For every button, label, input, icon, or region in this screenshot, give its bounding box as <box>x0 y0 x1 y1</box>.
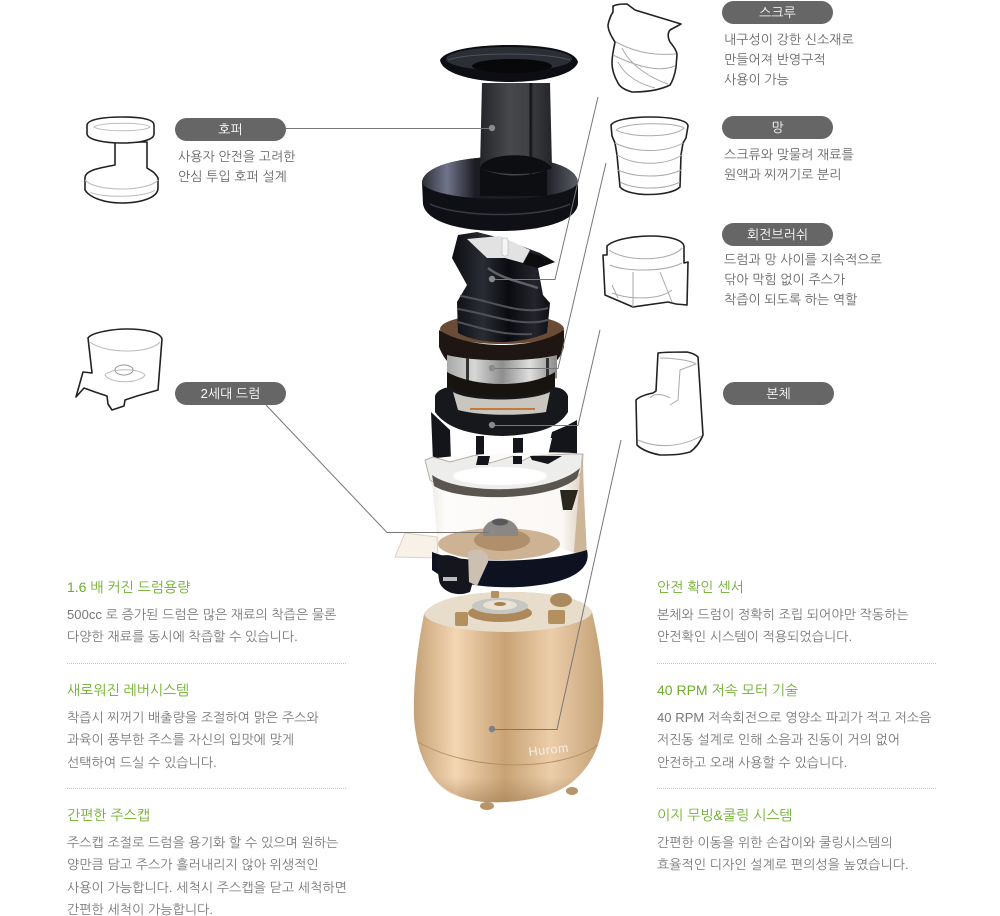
text: brush description: 착즙이 되도록 하는 역할 <box>724 292 857 307</box>
part: strainer <box>439 330 564 402</box>
text: strainer description <box>724 147 854 182</box>
feature: juice cap: 양만큼 담고 주스가 흘러내리지 않아 위생적인 <box>67 857 319 872</box>
feature: easy moving and cooling: 효율적인 디자인 설계로 편의성을 높였습니다. <box>657 857 909 872</box>
label: main body: 본체 <box>766 386 791 401</box>
label: screw <box>722 1 833 24</box>
feature: lever system: 새로워진 레버시스템 <box>67 682 189 698</box>
part: main body <box>414 591 603 810</box>
part: hopper <box>422 45 578 231</box>
feature: low speed motor: 40 RPM 저속 모터 기술 <box>657 682 798 698</box>
part: main body: Hurom <box>528 741 570 759</box>
feature: drum capacity: 다양한 재료를 동시에 착즙할 수 있습니다. <box>67 629 298 644</box>
text: screw description: 내구성이 강한 신소재로 <box>724 32 854 47</box>
feature: safety sensor <box>657 579 909 644</box>
feature: low speed motor: 안전하고 오래 사용할 수 있습니다. <box>657 755 847 770</box>
feature: juice cap: 사용이 가능합니다. 세척시 주스캡을 닫고 세척하면 <box>67 880 347 895</box>
icon: strainer outline <box>611 117 688 194</box>
feature: juice cap <box>67 807 347 916</box>
feature: juice cap: 주스캡 조절로 드럼을 용기화 할 수 있으며 원하는 <box>67 835 338 850</box>
text: screw description: 만들어져 반영구적 <box>724 52 826 67</box>
label: screw: 스크루 <box>759 5 796 20</box>
leader dots <box>489 125 495 732</box>
feature: lever system: 선택하여 드실 수 있습니다. <box>67 755 217 770</box>
icon: screw outline <box>608 4 681 92</box>
text: hopper description <box>178 149 296 184</box>
feature: lever system: 착즙시 찌꺼기 배출량을 조절하여 맑은 주스와 <box>67 710 319 725</box>
feature: lever system <box>67 682 319 770</box>
label: drum: 2세대 드럼 <box>201 386 260 401</box>
feature: low speed motor: 저진동 설계로 인해 소음과 진동이 거의 없어 <box>657 732 900 747</box>
feature: drum capacity: 500cc 로 증가된 드럼은 많은 재료의 착즙은 물론 <box>67 607 336 622</box>
icon: juice drum outline <box>76 329 162 410</box>
part: rotating brush <box>431 387 577 468</box>
text: brush description: 드럼과 망 사이를 지속적으로 <box>724 252 882 267</box>
text: strainer description: 스크류와 맞물려 재료를 <box>724 147 854 162</box>
label: main body <box>723 382 834 405</box>
feature: low speed motor <box>657 682 931 770</box>
feature: easy moving and cooling: 간편한 이동을 위한 손잡이와 쿨링시스템의 <box>657 835 893 850</box>
feature: drum capacity: 1.6 배 커진 드럼용량 <box>67 579 190 595</box>
feature: easy moving and cooling <box>657 807 909 872</box>
feature: juice cap: 간편한 주스캡 <box>67 807 150 823</box>
label: strainer: 망 <box>771 120 784 135</box>
label: drum <box>175 382 286 405</box>
label: hopper <box>175 118 286 141</box>
label: rotating brush: 회전브러쉬 <box>747 227 808 242</box>
part: screw <box>440 232 564 344</box>
part: juice drum <box>395 452 588 594</box>
text: strainer description: 원액과 찌꺼기로 분리 <box>724 167 842 182</box>
label: rotating brush <box>722 223 833 246</box>
text: brush description <box>724 252 882 307</box>
feature: safety sensor: 본체와 드럼이 정확히 조립 되어야만 작동하는 <box>657 607 909 622</box>
text: brush description: 닦아 막힘 없이 주스가 <box>724 272 845 287</box>
text: screw description <box>724 32 854 87</box>
label: strainer <box>722 116 833 139</box>
leader lines <box>266 97 621 730</box>
feature: drum capacity <box>67 579 336 644</box>
feature: low speed motor: 40 RPM 저속회전으로 영양소 파괴가 적고 저소음 <box>657 710 931 725</box>
feature: safety sensor: 안전 확인 센서 <box>657 579 744 595</box>
text: screw description: 사용이 가능 <box>724 72 789 87</box>
feature: safety sensor: 안전확인 시스템이 적용되었습니다. <box>657 629 852 644</box>
text: hopper description: 안심 투입 호퍼 설계 <box>178 169 287 184</box>
text: hopper description: 사용자 안전을 고려한 <box>178 149 296 164</box>
icon: main body outline <box>636 352 703 455</box>
icon: brush outline <box>603 236 688 307</box>
label: hopper: 호퍼 <box>218 122 243 137</box>
icon: hopper outline <box>85 117 158 203</box>
feature: lever system: 과육이 풍부한 주스를 자신의 입맛에 맞게 <box>67 732 294 747</box>
feature: easy moving and cooling: 이지 무빙&쿨링 시스템 <box>657 807 793 823</box>
